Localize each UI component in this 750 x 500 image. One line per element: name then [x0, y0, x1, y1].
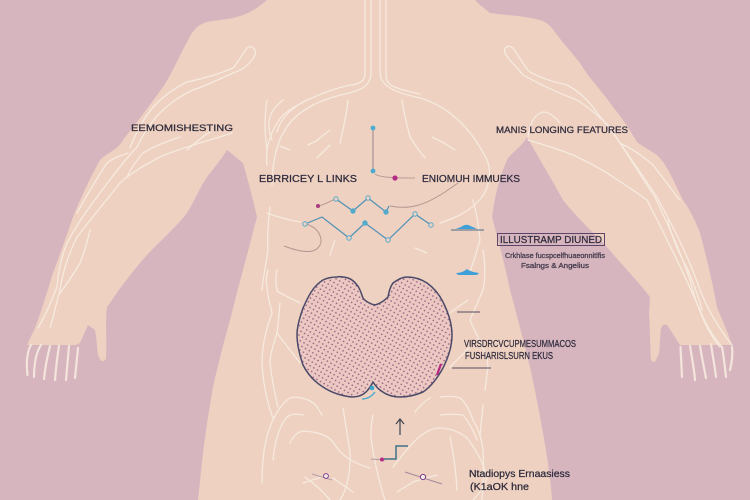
arrow up [396, 419, 404, 435]
hand fingers: left [27, 345, 78, 380]
organ callout rules [452, 312, 491, 368]
step connector [371, 446, 408, 462]
right arm lines [505, 53, 720, 347]
boxed label caption: Crkhlase fucspcelfhuaeonnitlfis [505, 253, 606, 260]
marker: lower right [405, 472, 442, 484]
organ callout label: VIRSDRCVCUPMESUMMACOS [464, 339, 576, 350]
pelvis lines [262, 397, 322, 483]
vertical pointer [371, 126, 415, 181]
label: upper right: MANIS LONGING FEATURES [496, 125, 628, 136]
organ: magenta accent [437, 364, 441, 375]
boxed label caption: Fsalngs & Angelius [521, 263, 590, 270]
marker: lower left [312, 474, 332, 480]
organ callout label: FUSHARISLSURN EKUS [465, 351, 553, 362]
label: mid left: EBRRICEY L LINKS [259, 174, 357, 185]
label: mid right: ENIOMUH IMMUEKS [422, 174, 520, 185]
left arm lines [38, 55, 255, 328]
hand fingers: right [680, 344, 732, 380]
label: lower right [469, 469, 570, 493]
label: lower right: Ntadiopys Ernaasiess [469, 469, 570, 480]
boxed label: ILLUSTRAMP DIUNED [500, 235, 602, 246]
left lower torso lines [262, 270, 273, 418]
wave chart: lower [284, 212, 433, 252]
organ: dotted lobes [297, 277, 452, 397]
organ: bottom marker [362, 386, 375, 399]
blue mark: lower [456, 269, 479, 275]
label: lower right: (K1aOK hne [470, 482, 529, 493]
blue mark: upper [451, 225, 484, 230]
boxed label caption [505, 253, 606, 270]
label: upper left: EEMOMISHESTING [131, 123, 233, 134]
organ callout label [464, 339, 576, 362]
wave chart: upper [316, 183, 458, 214]
